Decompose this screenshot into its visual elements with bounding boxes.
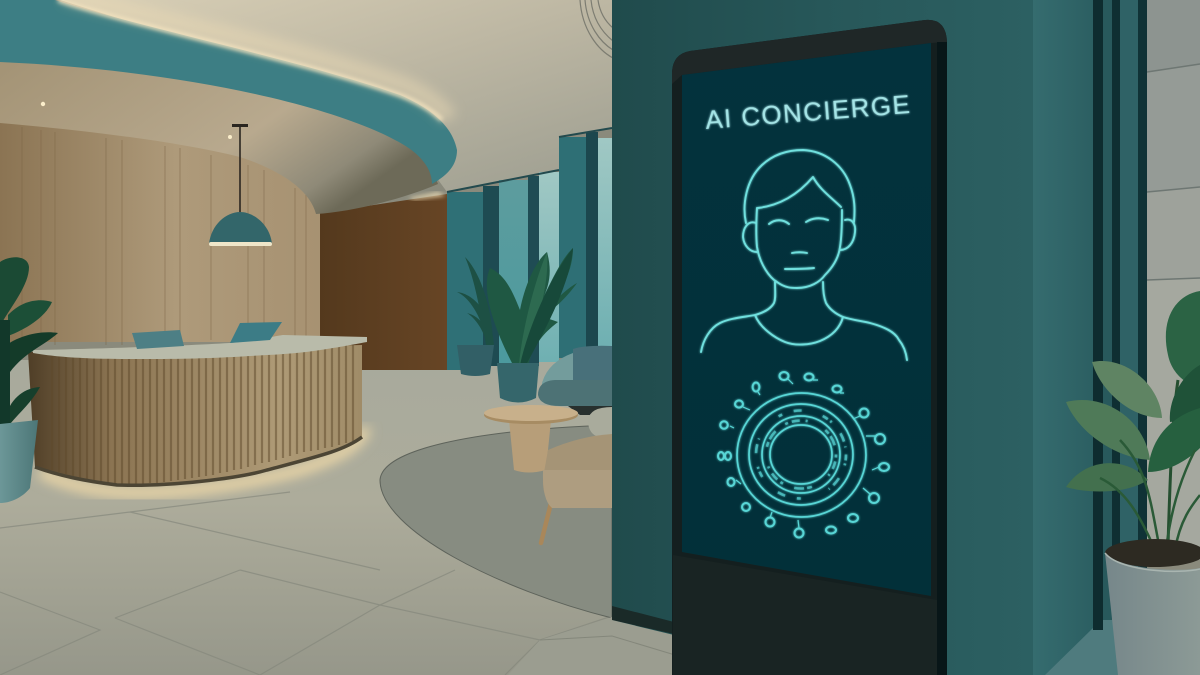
desk body xyxy=(28,345,362,485)
kiosk xyxy=(672,20,947,675)
beige armchair xyxy=(541,434,612,543)
desk under-glow on floor xyxy=(40,428,366,493)
left plant xyxy=(0,257,58,424)
stone cladding panels xyxy=(1147,0,1200,560)
ceiling vent xyxy=(580,0,613,58)
right plant leaves xyxy=(1066,291,1200,550)
glowing cove light xyxy=(58,0,442,120)
dark wood wall xyxy=(320,194,447,370)
central plant xyxy=(487,248,577,365)
floor tile joints xyxy=(0,492,615,675)
screen title: AI CONCIERGE xyxy=(704,89,911,135)
pouf xyxy=(588,407,612,436)
floor at right of column xyxy=(1045,620,1130,675)
wood panel back wall xyxy=(0,120,320,342)
background pot small xyxy=(457,345,494,376)
pendant lamp xyxy=(209,124,272,246)
background plant small xyxy=(457,257,494,350)
desk top xyxy=(33,335,367,359)
desk slats xyxy=(52,342,353,484)
central pot xyxy=(497,363,539,402)
floor xyxy=(0,360,620,675)
monitor left xyxy=(132,330,184,349)
icon: concentric rings with outer glyph dots xyxy=(718,372,889,538)
icon: person outline xyxy=(701,150,907,360)
ceiling soffit underside xyxy=(0,60,438,214)
floor between column and kiosk bottom xyxy=(508,617,674,675)
armchair teal xyxy=(538,346,612,415)
teal column xyxy=(612,0,1034,675)
rug xyxy=(380,425,612,618)
screen xyxy=(682,43,931,596)
ceiling xyxy=(0,0,612,192)
monitor right xyxy=(230,322,282,343)
round coffee table xyxy=(484,405,578,472)
window wall behind xyxy=(447,128,613,370)
ceiling downlights xyxy=(41,102,232,139)
curved teal ceiling band xyxy=(0,0,457,184)
right plant xyxy=(1066,291,1200,675)
kiosk housing xyxy=(672,20,947,675)
desk base shadow line xyxy=(35,437,362,485)
reception desk xyxy=(28,322,367,485)
right planter xyxy=(1105,539,1200,567)
kiosk base plinth xyxy=(673,555,937,675)
left planter xyxy=(0,420,38,503)
dark window frames right xyxy=(1093,0,1147,630)
